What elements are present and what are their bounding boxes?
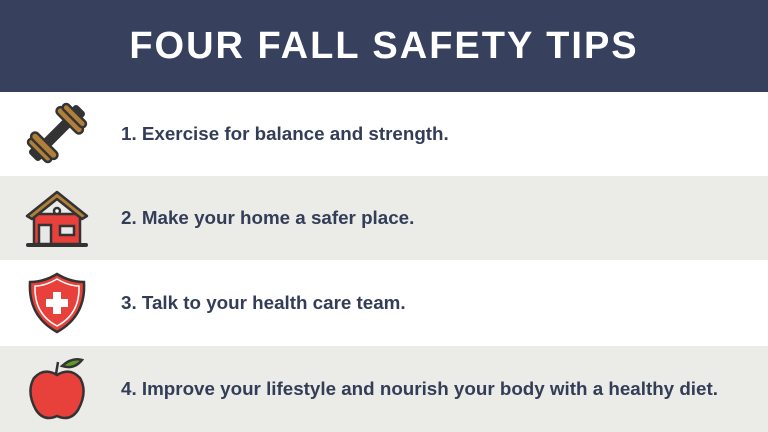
icon: dumbbell — [26, 102, 88, 164]
title: FOUR FALL SAFETY TIPS — [129, 25, 639, 67]
row 1: exercise — [0, 92, 768, 176]
text 2: 2. Make your home a safer place. — [121, 207, 414, 228]
icon: house — [26, 190, 88, 247]
text 1: 1. Exercise for balance and strength. — [121, 123, 449, 144]
icon: shield — [28, 272, 86, 334]
text 4: 4. Improve your lifestyle and nourish your body with a healthy diet. — [121, 378, 718, 399]
row 2: home — [0, 176, 768, 260]
row 4: lifestyle — [0, 346, 768, 432]
title — [0, 0, 768, 92]
icon: apple — [29, 358, 85, 420]
text 3: 3. Talk to your health care team. — [121, 292, 406, 313]
row 3: health care — [0, 260, 768, 346]
